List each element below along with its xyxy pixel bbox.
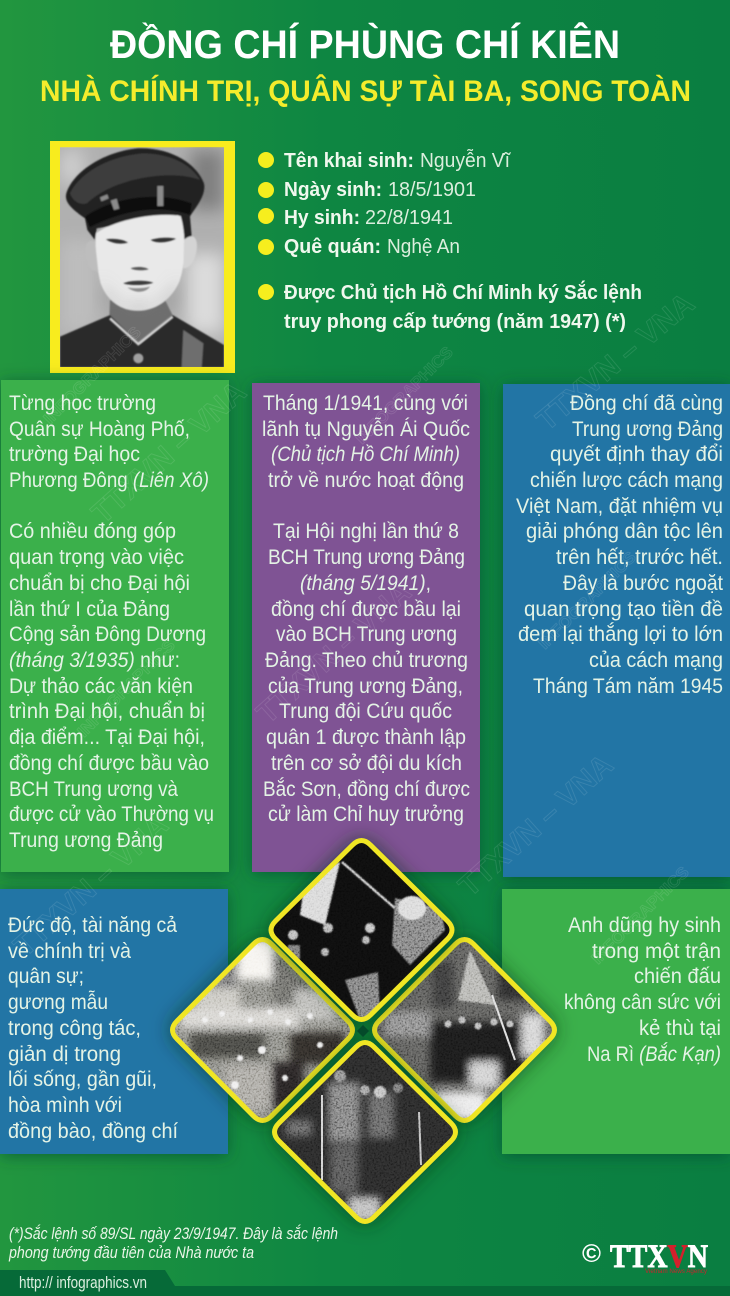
text: education and party congress: đồng chí được bầu vào xyxy=(9,752,209,775)
text: heroic sacrifice: trong một trận xyxy=(592,940,721,963)
text: return to Vietnam 1941: lãnh tụ Nguyễn Ái Quốc xyxy=(262,418,470,441)
infographic canvas: INFOGRAPHICS xyxy=(536,549,640,653)
photo diamond: left, rally crowd xyxy=(165,932,360,1128)
text: return to Vietnam 1941: cử làm Chỉ huy trưởng xyxy=(268,803,464,826)
text: virtue and lifestyle: giản dị trong xyxy=(8,1043,121,1066)
panel: heroic sacrifice xyxy=(502,889,730,1154)
text: change of revolutionary strategy: giải phóng dân tộc lên xyxy=(526,520,723,543)
text: education and party congress: BCH Trung ương và xyxy=(9,778,178,801)
personal info list xyxy=(258,149,642,333)
photo collage: four diamonds xyxy=(165,833,562,1229)
footer bar with website link xyxy=(0,1270,730,1296)
text: education and party congress: (tháng 3/1935) như: xyxy=(9,649,180,672)
text: education and party congress: Từng học trường xyxy=(9,392,156,415)
text: education and party congress: lần thứ I của Đảng xyxy=(9,598,170,621)
text: education and party congress: quan trọng vào việc xyxy=(9,546,184,569)
text: return to Vietnam 1941: trên cơ sở đội du kích xyxy=(271,752,462,775)
info: date of birth xyxy=(258,178,476,201)
infographic canvas: INFOGRAPHICS xyxy=(75,637,179,741)
info: date of birth: Ngày sinh: xyxy=(284,178,382,201)
text: virtue and lifestyle: lối sống, gần gũi, xyxy=(8,1068,157,1091)
text: heroic sacrifice: Anh dũng hy sinh xyxy=(568,914,721,937)
text: virtue and lifestyle xyxy=(8,914,178,1143)
text: return to Vietnam 1941: (tháng 5/1941), xyxy=(300,572,431,595)
footnote: (*)Sắc lệnh số 89/SL ngày 23/9/1947. Đây là sắc lệnh xyxy=(9,1224,338,1243)
logo: TTXVN copyright: TTXVN xyxy=(610,1239,708,1275)
text: return to Vietnam 1941: đồng chí được bầu lại xyxy=(271,598,461,621)
text: virtue and lifestyle: quân sự; xyxy=(8,965,84,988)
text: education and party congress: Phương Đông (Liên Xô) xyxy=(9,469,209,492)
heading: main title: ĐỒNG CHÍ PHÙNG CHÍ KIÊN xyxy=(110,21,620,67)
text: return to Vietnam 1941: vào BCH Trung ương xyxy=(276,623,457,646)
text: heroic sacrifice: chiến đấu xyxy=(634,965,721,988)
text: return to Vietnam 1941 xyxy=(262,392,470,826)
panel: education and party congress xyxy=(1,380,229,872)
infographic canvas: TTXVN – VNA xyxy=(86,375,253,530)
text: education and party congress: Quân sự Hoàng Phố, xyxy=(9,418,190,441)
photo diamond: top, raising the flag xyxy=(264,833,459,1027)
info: birth name xyxy=(258,149,511,172)
text: education and party congress: Trung ương Đảng xyxy=(9,829,163,852)
heading: subtitle: NHÀ CHÍNH TRỊ, QUÂN SỰ TÀI BA, SONG TOÀN xyxy=(40,74,691,108)
text: education and party congress: Cộng sản Đông Dương xyxy=(9,623,206,646)
text: return to Vietnam 1941: của Trung ương Đảng, xyxy=(268,675,463,698)
text: return to Vietnam 1941: Tháng 1/1941, cùng với xyxy=(263,392,468,415)
text: virtue and lifestyle: gương mẫu xyxy=(8,991,108,1014)
text: education and party congress: địa điểm... Tại Đại hội, xyxy=(9,726,205,749)
info: date of death: Hy sinh: xyxy=(284,206,360,229)
photo diamond: bottom, marching group xyxy=(267,1035,463,1229)
text: change of revolutionary strategy: trên hết, trước hết. xyxy=(556,546,723,569)
text: education and party congress: Dự thảo các văn kiện xyxy=(9,675,193,698)
text: change of revolutionary strategy: Việt Nam, đặt nhiệm vụ xyxy=(516,495,723,518)
infographic canvas: TTXVN – VNA xyxy=(251,575,418,730)
text: change of revolutionary strategy xyxy=(516,392,723,698)
text: change of revolutionary strategy: của cách mạng xyxy=(589,649,723,672)
text: virtue and lifestyle: Đức độ, tài năng cả xyxy=(8,914,177,937)
info: hometown: Quê quán: xyxy=(284,235,381,258)
info: date of death: 22/8/1941 xyxy=(365,206,453,229)
text: education and party congress: trình Đại hội, chuẩn bị xyxy=(9,700,205,723)
infographic canvas: INFOGRAPHICS xyxy=(41,324,145,428)
info: birth name: Nguyễn Vĩ xyxy=(420,149,511,172)
footnote: phong tướng đầu tiên của Nhà nước ta xyxy=(8,1243,254,1262)
text: education and party congress: Có nhiều đóng góp xyxy=(9,520,176,543)
text: return to Vietnam 1941: Đảng. Theo chủ trương xyxy=(265,649,468,672)
text: virtue and lifestyle: hòa mình với xyxy=(8,1094,122,1117)
panel: change of revolutionary strategy xyxy=(503,384,730,877)
text: return to Vietnam 1941: Bắc Sơn, đồng chí được xyxy=(263,778,470,801)
logo: TTXVN copyright: © xyxy=(582,1240,602,1268)
text: heroic sacrifice: kẻ thù tại xyxy=(639,1017,721,1040)
text: return to Vietnam 1941: quân 1 được thành lập xyxy=(266,726,466,749)
text: education and party congress: trường Đại học xyxy=(9,443,140,466)
info: hometown xyxy=(258,235,460,258)
info: posthumous rank: Được Chủ tịch Hồ Chí Minh ký Sắc lệnh xyxy=(284,280,642,304)
infographic canvas: TTXVN – VNA xyxy=(8,808,175,963)
text: change of revolutionary strategy: Đồng chí đã cùng xyxy=(570,392,723,415)
info: date of death xyxy=(258,206,453,229)
text: return to Vietnam 1941: trở về nước hoạt động xyxy=(268,469,464,492)
info: hometown: Nghệ An xyxy=(387,235,460,258)
text: heroic sacrifice: Na Rì (Bắc Kạn) xyxy=(587,1043,721,1066)
panel: return to Vietnam 1941 xyxy=(252,383,480,872)
infographic canvas: TTXVN – VNA xyxy=(453,748,620,903)
text: education and party congress: chuẩn bị cho Đại hội xyxy=(9,572,190,595)
info: posthumous rank: truy phong cấp tướng (năm 1947) (*) xyxy=(284,310,626,333)
info: birth name: Tên khai sinh: xyxy=(284,149,414,172)
text: return to Vietnam 1941: Tại Hội nghị lần thứ 8 xyxy=(273,520,459,543)
text: change of revolutionary strategy: quan trọng tạo tiền đề xyxy=(524,598,723,621)
infographic canvas: INFOGRAPHICS xyxy=(589,864,693,968)
info: posthumous rank xyxy=(258,280,642,333)
text: education and party congress xyxy=(9,392,214,852)
infographic canvas: TTXVN – VNA xyxy=(530,287,701,437)
text: change of revolutionary strategy: quyết định thay đổi xyxy=(550,443,723,466)
photo diamond: right, troops with flag xyxy=(367,932,562,1128)
text: return to Vietnam 1941: BCH Trung ương Đảng xyxy=(268,546,465,569)
text: return to Vietnam 1941: Trung đội Cứu quốc xyxy=(279,700,452,723)
text: virtue and lifestyle: về chính trị và xyxy=(8,940,131,963)
text: virtue and lifestyle: đồng bào, đồng chí xyxy=(8,1120,178,1143)
text: return to Vietnam 1941: (Chủ tịch Hồ Chí Minh) xyxy=(271,443,460,466)
footnote xyxy=(8,1224,338,1262)
text: change of revolutionary strategy: đem lại thắng lợi to lớn xyxy=(518,623,723,646)
portrait photo in yellow frame xyxy=(50,141,235,373)
footer bar with website link: http:// infographics.vn xyxy=(19,1273,147,1292)
info: date of birth: 18/5/1901 xyxy=(388,178,476,201)
text: education and party congress: được cử vào Thường vụ xyxy=(9,803,214,826)
logo: TTXVN copyright: Vietnam News Agency xyxy=(645,1269,707,1275)
infographic canvas: INFOGRAPHICS xyxy=(353,344,457,448)
text: heroic sacrifice xyxy=(564,914,721,1066)
panel: virtue and lifestyle xyxy=(0,889,228,1154)
text: virtue and lifestyle: trong công tác, xyxy=(8,1017,141,1040)
